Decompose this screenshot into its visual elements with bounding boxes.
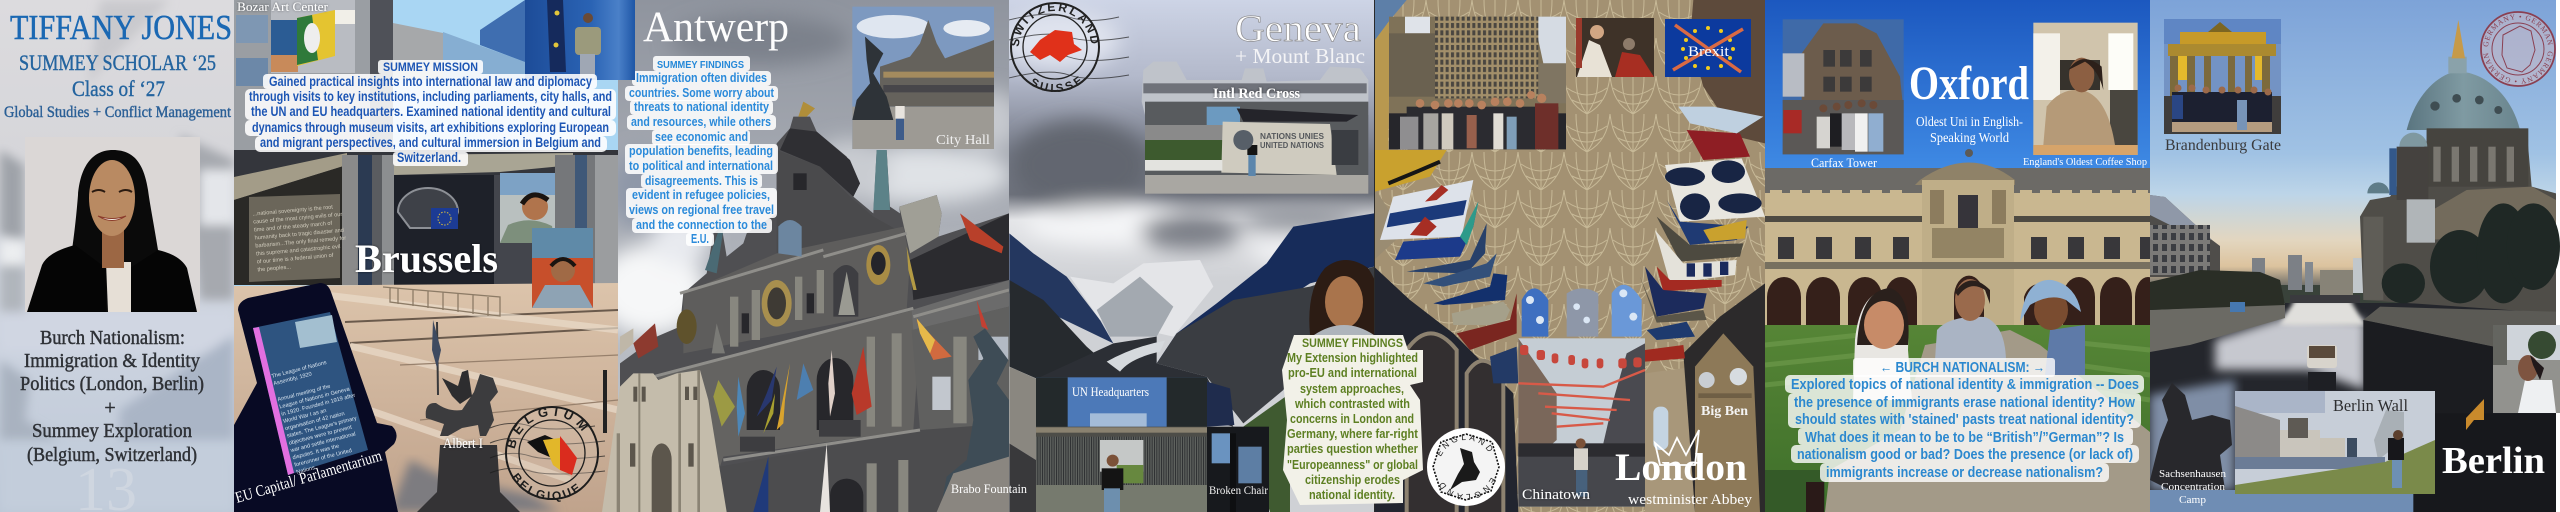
findings callout: [625, 56, 778, 246]
phone with League of Nations screen: organisation of 42 nation: [285, 411, 345, 432]
Oxford subtitle: [1916, 114, 2023, 145]
city title: Berlin: Berlin: [2442, 440, 2545, 482]
findings callout: disagreements. This is: [645, 174, 758, 188]
Intl Red Cross caption: Intl Red Cross: [1213, 86, 1300, 102]
Burch Nationalism callout: should states with 'stained' pasts treat national identity?: [1795, 412, 2134, 428]
findings callout: population benefits, leading: [629, 144, 773, 158]
Oxford subtitle: Oldest Uni in English-: [1916, 114, 2023, 129]
Belgium postage stamp: BELGIUM: [508, 408, 588, 448]
mission callout: [245, 60, 616, 166]
quote plaque: of our time is a federal union of: [257, 253, 334, 265]
name and scholar heading: Class of ‘27: [72, 76, 165, 101]
Berlin Wall photo: [2235, 391, 2435, 494]
project description: Summey Exploration: [32, 420, 192, 442]
stained glass windows: [1522, 285, 1642, 337]
alpine valley: [1009, 213, 1374, 512]
Sachsenhausen statue: [2150, 383, 2232, 506]
city hall facade: [620, 102, 1009, 512]
findings callout: extension: SUMMEY FINDINGS: [1302, 336, 1403, 350]
findings callout: extension: "Europeanness" or global: [1287, 457, 1418, 472]
quote plaque: this supreme and catastrophic evil: [256, 244, 341, 257]
Big Ben caption: Big Ben: [1701, 404, 1748, 419]
Berlin Wall photo: Berlin Wall: [2333, 396, 2408, 415]
findings callout: extension: [1282, 335, 1423, 505]
heraldic banners: [1375, 107, 1765, 383]
project description: Burch Nationalism:: [40, 327, 185, 349]
mission callout: dynamics through museum visits, art exhibitions exploring European: [252, 120, 609, 135]
panel: London: [1374, 0, 1765, 512]
City Hall caption: City Hall: [936, 133, 990, 148]
name and scholar heading: Global Studies + Conflict Management: [4, 104, 231, 121]
name and scholar heading: TIFFANY JONES: [10, 8, 232, 47]
far skyline: [2252, 255, 2365, 295]
college quad building: [1765, 149, 2161, 338]
name and scholar heading: [4, 8, 232, 121]
phone with League of Nations screen: [233, 283, 398, 512]
phone with League of Nations screen: in 1920. Founded in 1919 after: [281, 393, 356, 418]
caption: Westminster Abbey: westminister Abbey: [1628, 492, 1753, 508]
lamp post: [603, 370, 607, 433]
United Nations sign: UNITED NATIONS: [1260, 141, 1325, 150]
quote plaque: the peoples...: [257, 264, 292, 273]
left apartment block: [2150, 195, 2285, 312]
findings callout: see economic and: [655, 130, 748, 144]
Burch Nationalism callout: the presence of immigrants erase national identity? How: [1794, 395, 2136, 411]
findings callout: countries. Some worry about: [629, 86, 775, 100]
quote plaque: ...national sovereignty is the root: [252, 205, 334, 218]
Red Cross / UN Geneva photo: [1142, 62, 1368, 194]
Germany stamp: [2480, 11, 2556, 87]
mission callout: the UN and EU headquarters. Examined national identity and cultural: [251, 104, 611, 119]
phone with League of Nations screen: The League of Nations: [271, 360, 327, 380]
Switzerland postage stamp: SUISSE: [1032, 76, 1083, 92]
findings callout: Immigration often divides: [636, 71, 767, 85]
Burch Nationalism callout: What does it mean to be to be “British”/”German”? Is: [1805, 430, 2124, 446]
city title: Brussels: Brussels: [355, 236, 498, 281]
plaza: [234, 283, 618, 512]
mission callout: Gained practical insights into international law and diplomacy: [269, 74, 592, 89]
findings callout: threats to national identity: [634, 100, 769, 114]
city title: London: London: [1615, 446, 1747, 489]
Brabo Fountain label: Brabo Fountain: [951, 482, 1028, 496]
quote plaque: humanity back to tragic disaster and: [254, 228, 344, 241]
findings callout: extension: pro-EU and international: [1288, 365, 1417, 380]
quote plaque: time and of the steady march of: [254, 221, 333, 234]
phone with League of Nations screen: EU Capital/ Parlamentarium: [233, 447, 384, 507]
city title: Oxford: Oxford: [1909, 57, 2029, 110]
Albert I statue: [417, 320, 520, 512]
lawn and path: [1765, 325, 2150, 512]
quote plaque: cause of the most crying evils of our: [253, 212, 343, 226]
findings callout: SUMMEY FINDINGS: [657, 59, 744, 71]
phone with League of Nations screen: objectives were to prevent: [288, 425, 353, 447]
trees and embankment: [2363, 203, 2560, 512]
findings callout: and the connection to the: [636, 218, 767, 232]
Burch Nationalism callout: Explored topics of national identity & immigration -- Does: [1791, 377, 2139, 393]
three student portraits: [1853, 279, 2085, 400]
findings callout: evident in refugee policies,: [632, 188, 770, 202]
phone with League of Nations screen: Nations.: [296, 465, 318, 476]
quote plaque: barbarism...The only final remedy for: [255, 236, 347, 249]
city hall inset photo: [852, 7, 994, 149]
Brandenburg Gate caption: Brandenburg Gate: [2165, 137, 2281, 154]
phone with League of Nations screen: war and settle international: [289, 431, 356, 454]
Oxford subtitle: Speaking World: [1930, 130, 2009, 145]
findings callout: extension: national identity.: [1309, 487, 1395, 502]
phone with League of Nations screen: states. The League's primary: [286, 416, 358, 439]
Big Ben tower: [1695, 333, 1760, 512]
phone with League of Nations screen: League of Nations in Geneva: [279, 386, 351, 410]
project description: Immigration & Identity: [24, 350, 200, 372]
selfie photos: [500, 173, 593, 308]
parliament building: [234, 0, 618, 285]
England stamp: ENGLAND: [1440, 478, 1496, 500]
mission callout: SUMMEY MISSION: [383, 60, 478, 74]
Burch Nationalism callout: ← BURCH NATIONALISM: →: [1880, 360, 2045, 376]
Switzerland postage stamp: [1009, 2, 1130, 92]
boat on the river: [2307, 345, 2337, 390]
phone with League of Nations screen: World War I as an: [283, 408, 327, 425]
row of chairs: [383, 287, 500, 316]
England stamp: ENGLAND: [1436, 434, 1492, 456]
United Nations sign: NATIONS UNIES: [1260, 132, 1325, 141]
mission callout: and migrant perspectives, and cultural immersion in Belgium and: [260, 135, 601, 150]
Brandenburg Gate photo: [2164, 19, 2281, 134]
Bozar art photo: Bozar Art Center: [237, 0, 329, 14]
Belgium postage stamp: BELGIQUE: [512, 472, 581, 502]
river Spree: [2150, 285, 2556, 512]
panel: profile sidebar: [0, 0, 234, 512]
coffee shop photo: [2033, 23, 2138, 155]
Westminster Abbey vault and walls: [1374, 0, 1765, 512]
Carfax Tower caption: Carfax Tower: [1811, 156, 1878, 170]
Burch Nationalism callout: [1785, 358, 2144, 482]
panel: Antwerp: [595, 0, 1020, 512]
crown icon: [1655, 430, 1699, 465]
findings callout: extension: Germany, where far-right: [1287, 426, 1419, 441]
Sachsenhausen statue: Camp: [2179, 495, 2206, 506]
city title: Geneva: Geneva: [1235, 8, 1361, 50]
quote plaque: [249, 194, 349, 282]
portrait photo: [25, 137, 200, 312]
subtitle: Mount Blanc: + Mount Blanc: [1235, 44, 1365, 68]
Brabo fountain: [937, 328, 1009, 512]
Albert I statue: Albert I: [443, 436, 483, 452]
phone with League of Nations screen: forerunner of the United: [294, 448, 353, 469]
Burch Nationalism callout: immigrants increase or decrease nationalism?: [1826, 465, 2103, 481]
Chinatown photo: [1518, 338, 1645, 507]
findings callout: extension: which contrasted with: [1294, 396, 1410, 411]
Belgium postage stamp: [490, 406, 605, 502]
Broken Chair photo: [1207, 382, 1269, 512]
phone with League of Nations screen: Assembly, 1920: [273, 372, 313, 387]
mission callout: through visits to key institutions, including parliaments, city halls, and: [249, 89, 612, 104]
findings callout: extension: My Extension highlighted: [1287, 350, 1418, 365]
findings callout: to political and international: [629, 159, 773, 173]
Brexit flag: [1665, 19, 1751, 77]
project description: (Belgium, Switzerland): [27, 444, 197, 466]
findings callout: extension: concerns in London and: [1290, 411, 1414, 426]
Bozar art photo: [237, 0, 355, 73]
coffee shop caption: England's Oldest Coffee Shop: [2023, 157, 2147, 168]
St Michael cathedral: [602, 370, 727, 512]
hemicycle and EU flag: [398, 188, 458, 229]
city title: Antwerp: Antwerp: [643, 4, 789, 51]
findings callout: E.U.: [691, 232, 709, 246]
historic painting: [1576, 18, 1654, 77]
mission callout: Switzerland.: [397, 150, 461, 165]
Sachsenhausen statue: Sachsenhausen: [2159, 469, 2226, 480]
United Nations sign: [1260, 133, 1324, 148]
phone with League of Nations screen: Annual meeting of the: [277, 384, 331, 403]
Brexit flag: Brexit: [1688, 44, 1730, 60]
selfie cut-out: [1309, 260, 1374, 335]
Berlin Cathedral: [2360, 20, 2556, 313]
Carfax Tower photo: [1783, 19, 1904, 154]
project description: Politics (London, Berlin): [20, 373, 204, 395]
panel: Brussels: [234, 0, 618, 512]
EU representative photo: [525, 0, 635, 80]
project description: [20, 327, 204, 466]
findings callout: extension: citizenship erodes: [1305, 472, 1400, 487]
findings callout: and resources, while others: [631, 115, 771, 129]
findings callout: extension: parties question whether: [1287, 441, 1418, 456]
UN Headquarters caption: UN Headquarters: [1072, 385, 1149, 399]
Broken Chair caption: Broken Chair: [1209, 485, 1268, 497]
England stamp: [1427, 428, 1505, 506]
phone with League of Nations screen: disputes. It was the: [292, 443, 340, 461]
findings callout: views on regional free travel: [629, 203, 774, 217]
flags: [620, 213, 1003, 512]
panel: Geneva and Mont Blanc: [1009, 0, 1374, 512]
Switzerland postage stamp: SWITZERLAND: [1012, 4, 1098, 46]
Chinatown caption: Chinatown: [1522, 487, 1591, 503]
group photo at Parliament: [1389, 17, 1566, 149]
panel: Oxford: [1765, 0, 2161, 512]
name and scholar heading: SUMMEY SCHOLAR ‘25: [19, 50, 216, 75]
project description: +: [104, 397, 116, 419]
selfie photo: [2493, 325, 2560, 413]
Sachsenhausen statue: Concentration: [2161, 482, 2225, 493]
findings callout: extension: system approaches,: [1300, 381, 1404, 396]
flag on the Reichstag: [2466, 399, 2484, 430]
Burch Nationalism callout: nationalism good or bad? Does the presence (or lack of): [1797, 447, 2133, 463]
UN headquarters photo: [1036, 377, 1207, 512]
